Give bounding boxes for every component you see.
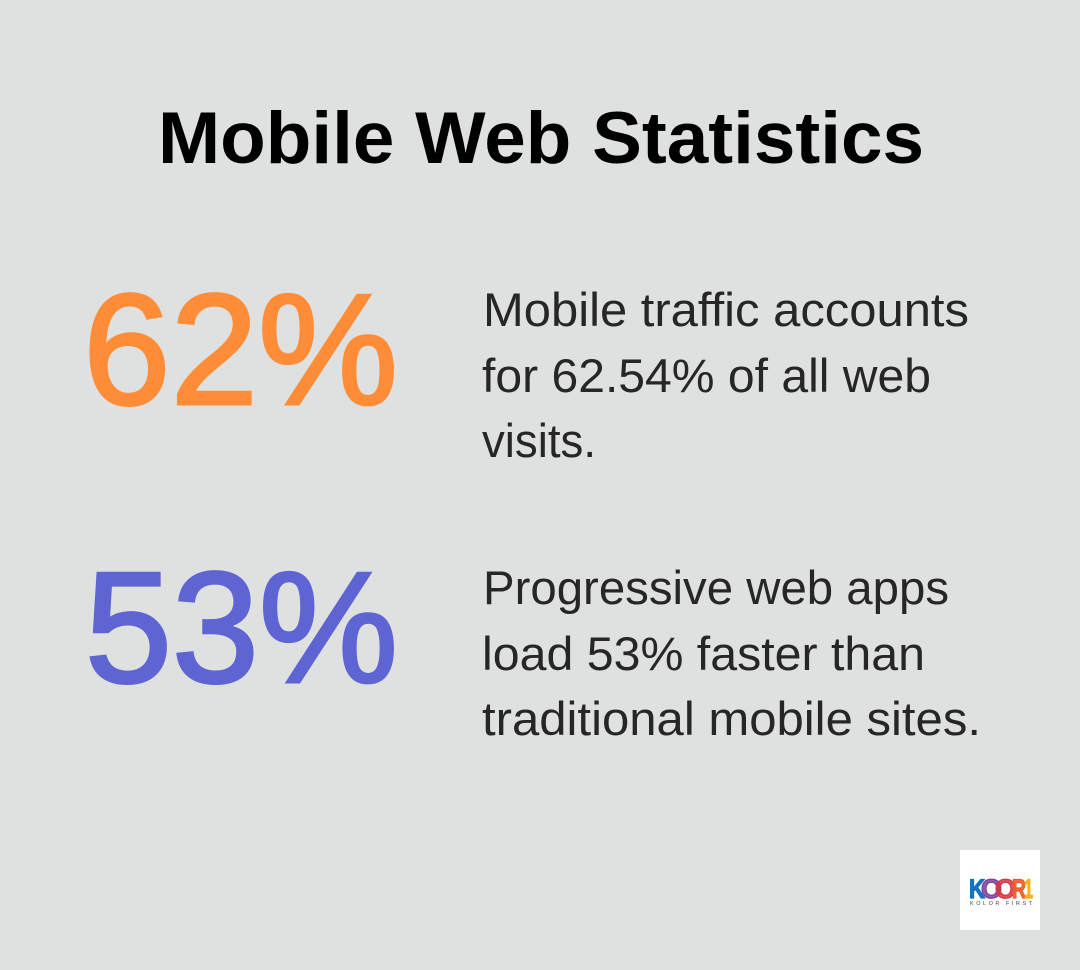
- logo wordmark: R: [1012, 874, 1026, 904]
- stat: 62 percent: [83, 262, 969, 467]
- title: Mobile Web Statistics: [158, 98, 924, 179]
- logo tagline: KOLOR FIRST: [970, 901, 1033, 907]
- logo wordmark: 1: [1024, 874, 1033, 904]
- logo wordmark: K: [969, 874, 985, 904]
- logo wordmark: O: [981, 874, 1002, 904]
- description: progressive web apps: load 53% faster than: [482, 627, 925, 680]
- number: 53%: 53%: [85, 540, 398, 716]
- stat: 53 percent: [85, 540, 981, 745]
- number: 62%: 62%: [83, 262, 398, 438]
- description: progressive web apps: traditional mobile sites.: [482, 692, 981, 745]
- description: progressive web apps: Progressive web apps: [483, 561, 949, 614]
- logo wordmark: O: [995, 874, 1016, 904]
- description: mobile traffic: for 62.54% of all web: [482, 349, 931, 402]
- description: mobile traffic: Mobile traffic accounts: [483, 283, 969, 336]
- logo wordmark: [969, 874, 1033, 904]
- logo: KOOR1 Kolor First: [960, 850, 1040, 930]
- description: progressive web apps: [482, 561, 981, 745]
- description: mobile traffic: visits.: [482, 414, 596, 467]
- description: mobile traffic: [482, 283, 969, 467]
